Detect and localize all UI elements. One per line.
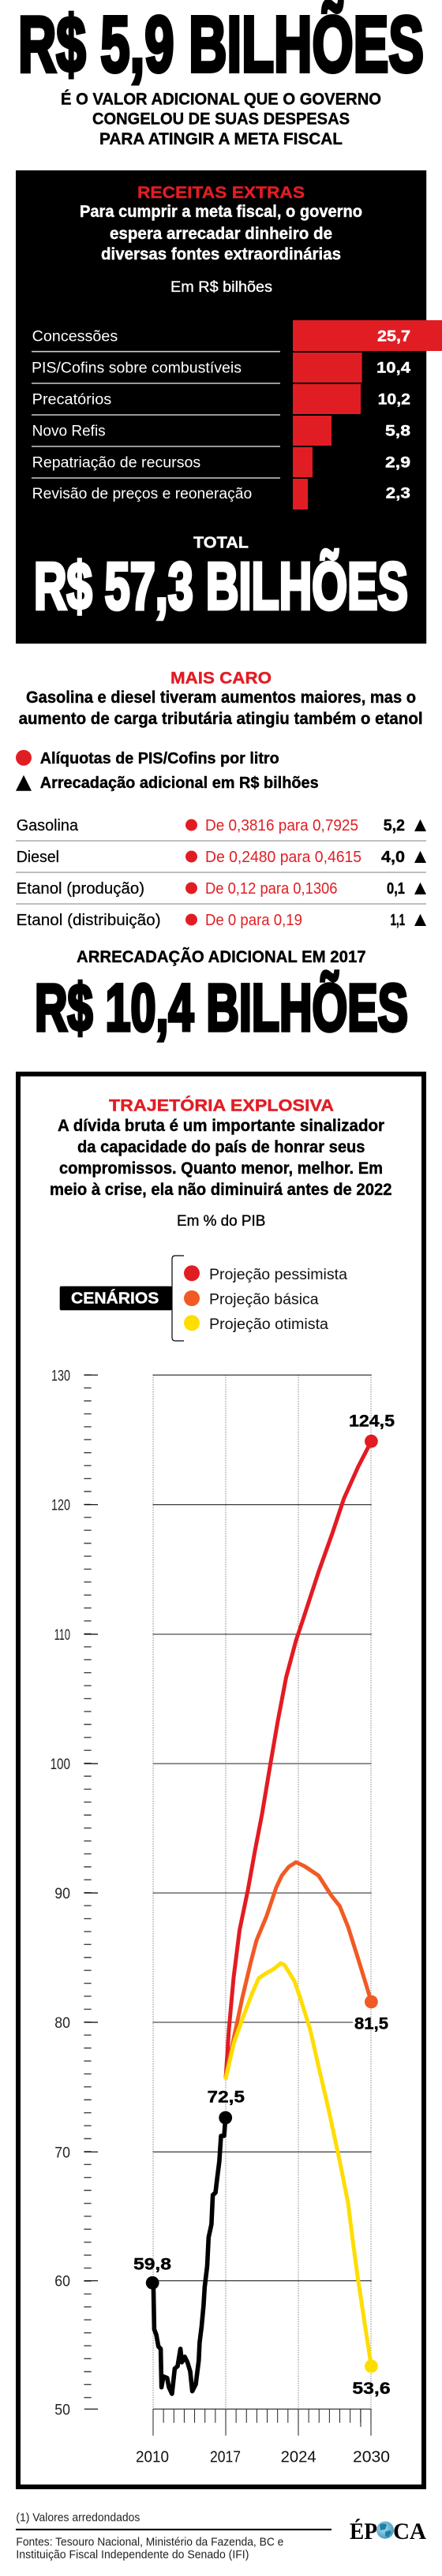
table: fuel tax rates: 5,2 bbox=[384, 817, 405, 834]
line: historical debt bbox=[133, 2088, 245, 2394]
unit note: Em % do PIB bbox=[177, 1213, 265, 1230]
panel intro text: espera arrecadar dinheiro de bbox=[110, 225, 332, 243]
intro text: A dívida bruta é um importante sinalizador bbox=[58, 1117, 384, 1135]
line: pessimistic projection bbox=[226, 1412, 395, 2078]
intro text: meio à crise, ela não diminuirá antes de 2022 bbox=[50, 1181, 391, 1199]
unit note: Em R$ bilhões bbox=[170, 279, 272, 296]
line: optimistic projection: 53,6 bbox=[352, 2380, 391, 2398]
bar chart: extra revenue: 2,3 bbox=[386, 486, 410, 502]
table: fuel tax rates bbox=[16, 817, 426, 929]
logo: Época: ÉP bbox=[350, 2518, 377, 2544]
additional revenue label: ARRECADAÇÃO ADICIONAL EM 2017 bbox=[77, 948, 366, 966]
bar chart: extra revenue: 2,9 bbox=[385, 454, 410, 471]
heading: trajetória explosiva: TRAJETÓRIA EXPLOSIVA bbox=[109, 1096, 334, 1115]
logo: Época: CA bbox=[393, 2518, 426, 2544]
subtitle: É O VALOR ADICIONAL QUE O GOVERNO bbox=[61, 91, 381, 109]
subtitle bbox=[61, 91, 381, 148]
table: fuel tax rates: 4,0 bbox=[381, 849, 405, 866]
table: fuel tax rates: Gasolina bbox=[17, 817, 79, 834]
table: fuel tax rates: 1,1 bbox=[391, 912, 405, 929]
subtitle: PARA ATINGIR A META FISCAL bbox=[99, 130, 343, 148]
y axis: 130 bbox=[51, 1368, 70, 1384]
chart: gross debt projections bbox=[51, 1368, 395, 2466]
y axis: 80 bbox=[54, 2015, 70, 2032]
panel intro text: Para cumprir a meta fiscal, o governo bbox=[80, 203, 362, 221]
bar chart: extra revenue: Revisão de preços e reoneração bbox=[32, 486, 252, 502]
intro text bbox=[19, 689, 423, 728]
subtitle: CONGELOU DE SUAS DESPESAS bbox=[92, 110, 350, 128]
panel heading: receitas extras: RECEITAS EXTRAS bbox=[137, 184, 305, 202]
table: fuel tax rates: De 0,12 para 0,1306 bbox=[205, 880, 338, 898]
legend: cenários: CENÁRIOS bbox=[71, 1290, 159, 1308]
table: fuel tax rates: De 0,3816 para 0,7925 bbox=[205, 817, 358, 834]
bar chart: extra revenue: 25,7 bbox=[377, 328, 410, 345]
legend: Arrecadação adicional em R$ bilhões bbox=[40, 775, 319, 792]
y axis: 90 bbox=[54, 1886, 70, 1902]
footer notes: Instituição Fiscal Independente do Senado (IFI) bbox=[16, 2548, 249, 2561]
footer notes: Fontes: Tesouro Nacional, Ministério da Fazenda, BC e bbox=[16, 2535, 283, 2548]
section: mais caro bbox=[16, 670, 426, 1044]
y axis bbox=[51, 1368, 98, 2418]
bar chart: extra revenue: Concessões bbox=[32, 329, 118, 345]
table: fuel tax rates: Etanol (distribuição) bbox=[17, 912, 161, 929]
line: basic projection bbox=[226, 1862, 388, 2077]
footer notes: (1) Valores arredondados bbox=[16, 2511, 140, 2525]
table: fuel tax rates: Diesel bbox=[17, 849, 59, 866]
bar chart: extra revenue: Repatriação de recursos bbox=[32, 455, 200, 472]
bar chart: extra revenue: PIS/Cofins sobre combustíveis bbox=[32, 360, 242, 377]
intro text bbox=[50, 1117, 391, 1199]
x axis: 2010 bbox=[136, 2449, 169, 2466]
legend: cenários: Projeção otimista bbox=[209, 1316, 328, 1333]
intro text: da capacidade do país de honrar seus bbox=[77, 1138, 365, 1156]
table: fuel tax rates: De 0 para 0,19 bbox=[205, 912, 302, 929]
line: historical debt: 59,8 bbox=[133, 2255, 171, 2273]
intro text: aumento de carga tributária atingiu também o etanol bbox=[19, 710, 423, 728]
total label: TOTAL bbox=[193, 534, 249, 552]
legend bbox=[16, 750, 319, 792]
line: pessimistic projection: 124,5 bbox=[349, 1412, 395, 1430]
table: fuel tax rates: Etanol (produção) bbox=[17, 880, 144, 898]
x axis: 2024 bbox=[281, 2449, 317, 2466]
y axis: 120 bbox=[51, 1498, 70, 1514]
line: historical debt: 72,5 bbox=[207, 2088, 245, 2106]
bar chart: extra revenue: Precatórios bbox=[32, 392, 111, 409]
panel: trajetória explosiva bbox=[18, 1074, 424, 2487]
panel intro text: diversas fontes extraordinárias bbox=[101, 245, 341, 263]
table: fuel tax rates: De 0,2480 para 0,4615 bbox=[205, 849, 361, 866]
bar chart: extra revenue: 10,4 bbox=[376, 360, 410, 376]
x axis: 2030 bbox=[353, 2449, 390, 2466]
y axis: 70 bbox=[54, 2145, 70, 2161]
legend: cenários: Projeção básica bbox=[209, 1291, 319, 1308]
legend: cenários bbox=[60, 1256, 347, 1341]
table: fuel tax rates: 0,1 bbox=[387, 880, 405, 898]
line: basic projection: 81,5 bbox=[354, 2014, 388, 2033]
x axis: 2017 bbox=[210, 2449, 241, 2466]
y axis: 50 bbox=[54, 2402, 70, 2418]
legend: cenários: Projeção pessimista bbox=[209, 1267, 347, 1283]
logo: Época bbox=[350, 2518, 426, 2544]
bar chart: extra revenue bbox=[32, 320, 442, 510]
legend: Alíquotas de PIS/Cofins por litro bbox=[40, 750, 279, 767]
intro text: compromissos. Quanto menor, melhor. Em bbox=[59, 1159, 383, 1178]
intro text: Gasolina e diesel tiveram aumentos maiores, mas o bbox=[26, 689, 416, 707]
footer notes bbox=[16, 2511, 332, 2561]
line: optimistic projection bbox=[226, 1963, 391, 2398]
bar chart: extra revenue: 5,8 bbox=[385, 423, 410, 439]
bar chart: extra revenue: 10,2 bbox=[378, 391, 410, 408]
y axis: 60 bbox=[54, 2274, 70, 2290]
bar chart: extra revenue: Novo Refis bbox=[32, 424, 106, 440]
panel: receitas extras bbox=[16, 170, 442, 644]
heading: mais caro: MAIS CARO bbox=[170, 670, 272, 688]
y axis: 100 bbox=[51, 1757, 70, 1773]
y axis: 110 bbox=[54, 1627, 70, 1644]
panel intro text bbox=[80, 203, 362, 263]
x axis bbox=[136, 2409, 390, 2466]
